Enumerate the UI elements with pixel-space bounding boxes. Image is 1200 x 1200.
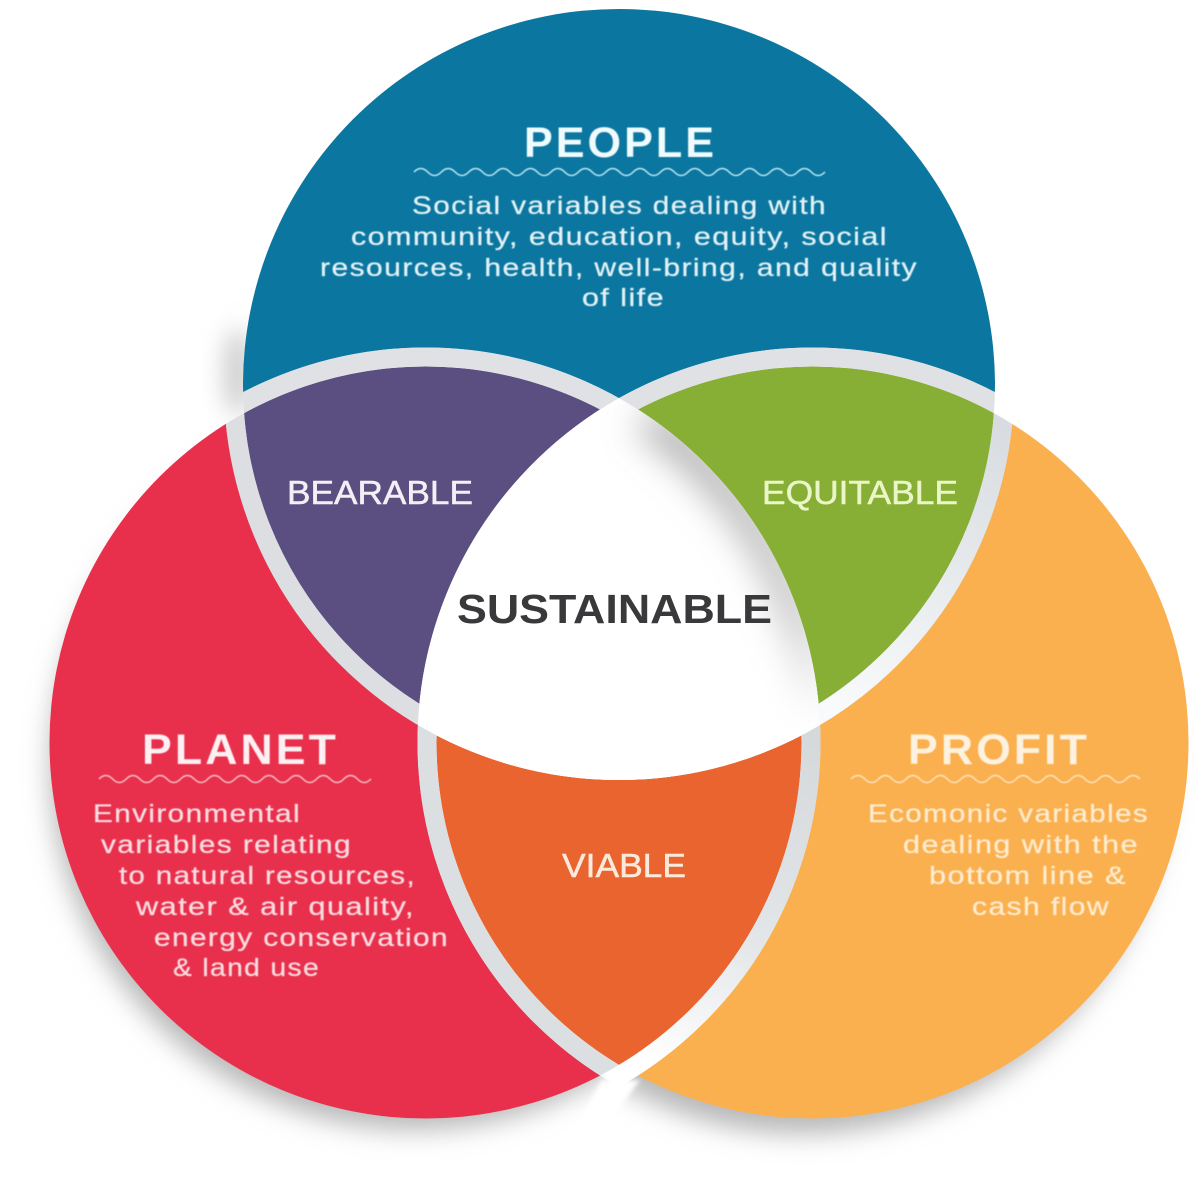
panel: profit circle xyxy=(638,424,1188,1118)
description: profit xyxy=(868,800,1149,921)
description: profit: dealing with the xyxy=(903,831,1139,859)
heading: people: PEOPLE xyxy=(524,119,717,167)
description: people xyxy=(320,192,918,312)
label: viable: VIABLE xyxy=(562,847,686,884)
heading: profit: PROFIT xyxy=(908,726,1090,774)
description: planet: Environmental xyxy=(93,800,301,828)
wavy rule: planet xyxy=(99,776,371,782)
description: profit: cash flow xyxy=(972,893,1110,921)
description: people: of life xyxy=(582,284,665,312)
description: planet xyxy=(93,800,449,982)
description: planet: water & air quality, xyxy=(135,893,415,921)
description: planet: energy conservation xyxy=(154,924,449,952)
overlap gaps xyxy=(226,348,1012,1076)
description: people: resources, health, well-bring, and quality xyxy=(320,254,918,282)
people text block xyxy=(320,119,918,312)
description: people: Social variables dealing with xyxy=(412,192,827,220)
wavy rule: people xyxy=(414,168,825,176)
planet text block xyxy=(93,726,449,982)
panel: people circle xyxy=(243,9,995,398)
panel: viable overlap xyxy=(436,736,802,1065)
drop shadows under circles xyxy=(50,328,1166,1146)
description: profit: Ecomonic variables xyxy=(868,800,1149,828)
wavy rule: profit xyxy=(851,776,1140,782)
heading: planet: PLANET xyxy=(142,726,339,774)
description: planet: variables relating xyxy=(101,831,352,859)
description: people: community, education, equity, social xyxy=(351,223,888,251)
label: bearable: BEARABLE xyxy=(287,474,473,511)
label: equitable: EQUITABLE xyxy=(762,474,958,511)
description: planet: to natural resources, xyxy=(119,862,416,890)
description: planet: & land use xyxy=(173,954,320,982)
panel: equitable overlap xyxy=(638,366,994,704)
panel: planet circle xyxy=(50,424,600,1118)
description: profit: bottom line & xyxy=(929,862,1127,890)
label: sustainable: SUSTAINABLE xyxy=(457,586,772,632)
profit text block xyxy=(851,726,1149,921)
panel: bearable overlap xyxy=(244,366,600,704)
